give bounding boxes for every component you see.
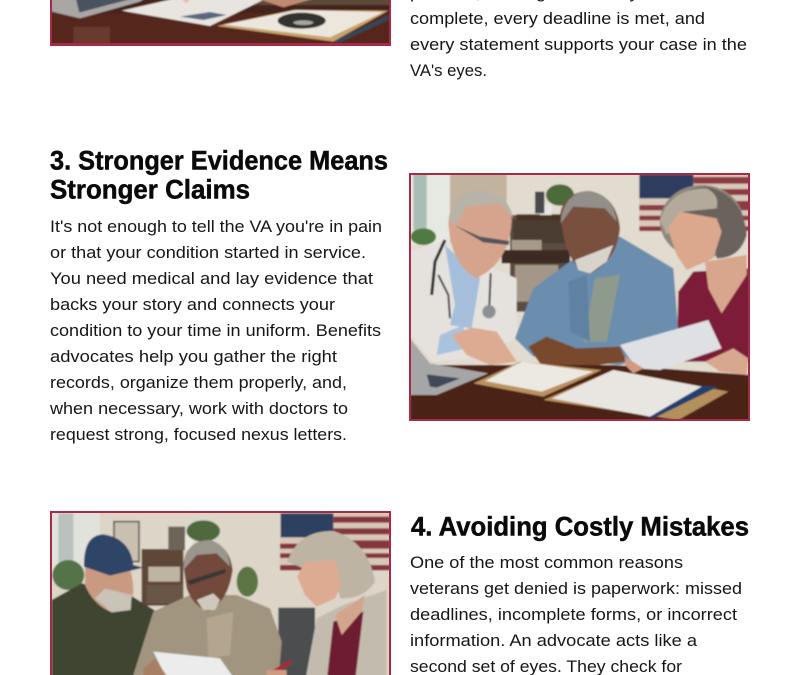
- photo: doctor, veteran and spouse reviewing records (section 3 image): [407, 172, 753, 425]
- text block: section 3 body: condition to your time in uniform. Benefits: [50, 321, 381, 340]
- text block: section 3 body: It's not enough to tell the VA you're in pain: [50, 217, 382, 236]
- text block: section 3 body: when necessary, work with doctors to: [49, 399, 348, 418]
- text block: end of section 2: [410, 0, 747, 80]
- photo: desk with laptop and clipboards (section 2 image): [50, 0, 391, 46]
- heading: section 4: 4. Avoiding Costly Mistakes: [411, 512, 749, 542]
- heading: section 3: [50, 146, 388, 204]
- text block: section 3 body: You need medical and lay evidence that: [50, 269, 373, 288]
- text block: section 4 body: veterans get denied is paperwork: missed: [410, 579, 742, 598]
- photo: three people reviewing paperwork (section 4 image): [47, 508, 397, 675]
- heading: section 3: 3. Stronger Evidence Means: [50, 146, 388, 176]
- heading: section 3: Stronger Claims: [50, 174, 250, 204]
- text block: section 4 body: [410, 553, 742, 675]
- text block: section 3 body: backs your story and connects your: [50, 295, 335, 314]
- text block: end of section 2: complete, every deadline is met, and: [410, 9, 705, 28]
- text block: section 3 body: advocates help you gather the right: [50, 347, 337, 366]
- text block: end of section 2: every statement supports your case in the: [410, 35, 747, 54]
- text block: section 4 body: information. An advocate acts like a: [410, 631, 698, 650]
- text block: section 3 body: records, organize them properly, and,: [50, 373, 347, 392]
- text block: section 3 body: [49, 217, 382, 444]
- text block: end of section 2: VA's eyes.: [410, 61, 487, 80]
- text block: section 3 body: or that your condition started in service.: [50, 243, 366, 262]
- text block: section 3 body: request strong, focused nexus letters.: [50, 425, 347, 444]
- text block: section 4 body: One of the most common reasons: [410, 553, 683, 572]
- text block: section 4 body: deadlines, incomplete forms, or incorrect: [410, 605, 737, 624]
